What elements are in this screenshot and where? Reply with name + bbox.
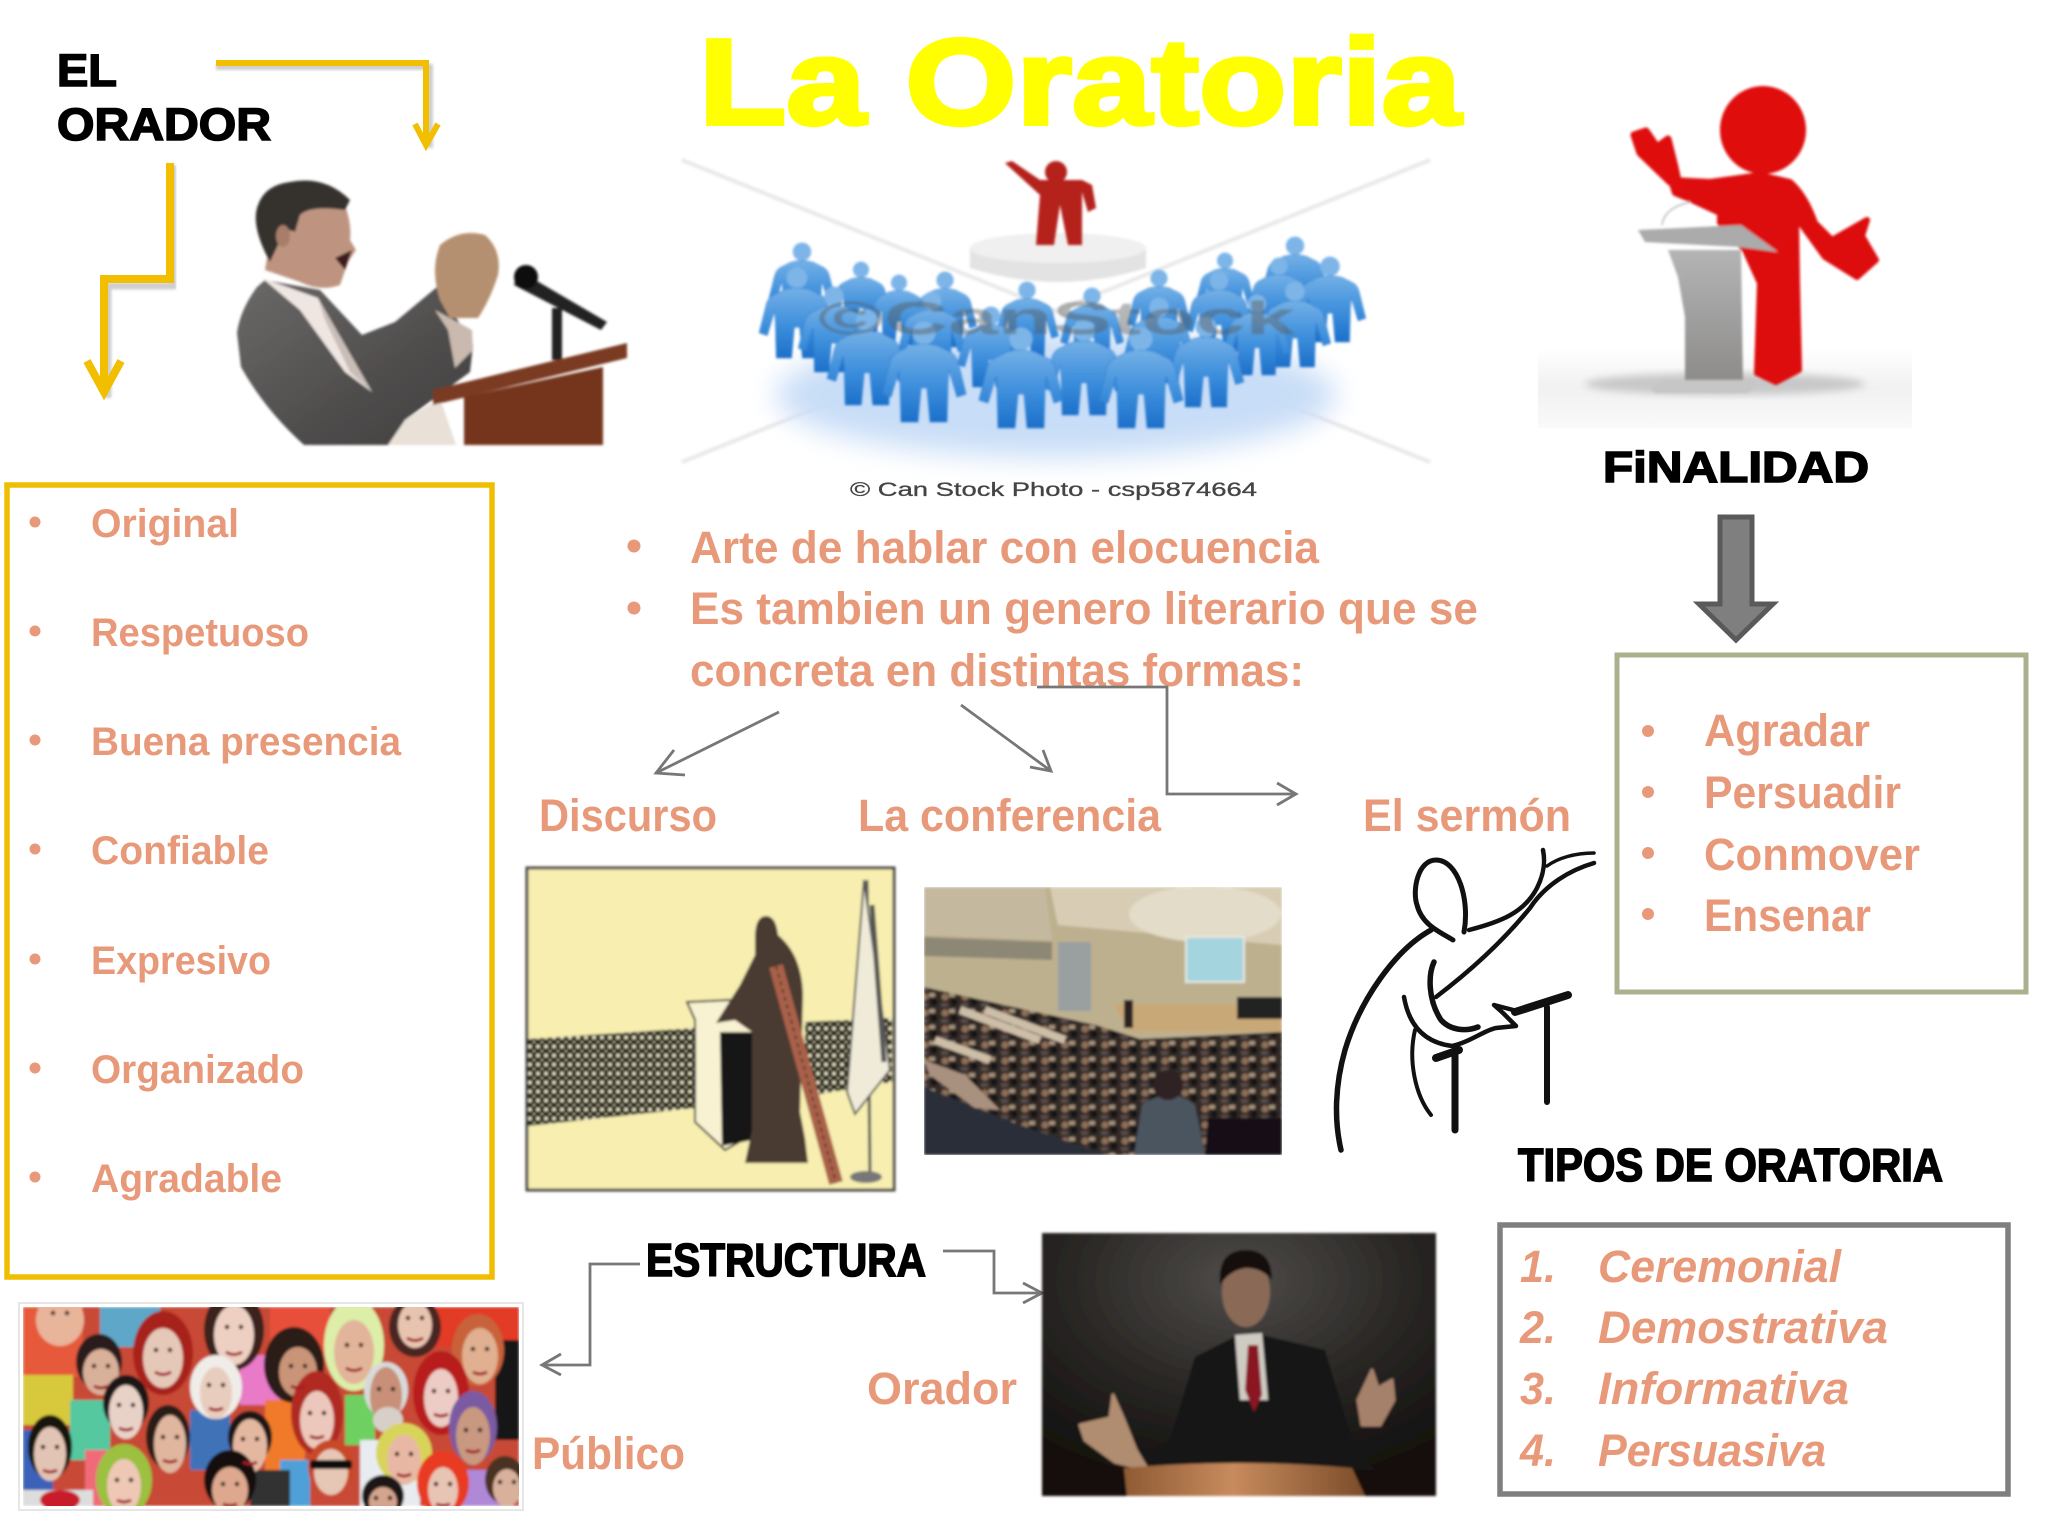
definition text: concreta en distintas formas:	[690, 645, 1304, 696]
image: speaker with raised fists	[237, 180, 627, 445]
image credit: © Can Stock Photo - csp5874664	[850, 480, 1258, 501]
tipos items: 3.	[1520, 1363, 1556, 1414]
image: conference hall	[924, 886, 1282, 1155]
arrow: to conferencia	[961, 705, 1051, 771]
label: discurso: Discurso	[539, 790, 717, 841]
finalidad items	[1642, 705, 1920, 941]
tipos items: Ceremonial	[1598, 1241, 1842, 1292]
label: publico: Público	[532, 1428, 685, 1479]
arrow: orador to list	[87, 163, 173, 398]
tipos items: 2.	[1519, 1302, 1556, 1353]
arrow: estructura to orador	[943, 1251, 1042, 1303]
label: la conferencia: La conferencia	[858, 790, 1162, 841]
panel: tipos list	[1500, 1225, 2008, 1494]
blue audience	[759, 237, 1366, 428]
image: audience and red speaker on platform	[682, 160, 1430, 501]
heading: tipos de oratoria: TIPOS DE ORATORIA	[1518, 1139, 1943, 1191]
heading: el orador: ORADOR	[57, 99, 271, 150]
image: speaker in dark suit	[1042, 1233, 1436, 1496]
qualities list	[30, 502, 402, 1201]
image: sermon line drawing	[1336, 850, 1594, 1150]
qualities list: Organizado	[91, 1048, 304, 1092]
heading: el orador	[57, 45, 271, 150]
red figure	[1005, 161, 1096, 245]
panel: finalidad list	[1617, 655, 2026, 992]
arrow: finalidad down	[1699, 517, 1773, 640]
tipos items: Demostrativa	[1598, 1302, 1888, 1353]
platform	[970, 233, 1146, 282]
arrow: orador to photo	[216, 63, 438, 148]
image: orator illustration on yellow	[527, 868, 894, 1190]
arrow: to discurso	[656, 712, 779, 775]
arrow: to sermon	[1037, 687, 1296, 805]
tipos items: Persuasiva	[1598, 1425, 1826, 1476]
finalidad items: Agradar	[1704, 705, 1870, 756]
qualities list: Original	[91, 502, 239, 546]
heading: el orador: EL	[57, 45, 117, 96]
finalidad items: Persuadir	[1704, 767, 1901, 818]
tipos items: 1.	[1520, 1241, 1556, 1292]
definition text: Es tambien un genero literario que se	[690, 583, 1478, 634]
tipos items: 4.	[1519, 1425, 1556, 1476]
qualities list: Buena presencia	[91, 720, 402, 764]
watermark: ©CanStock	[818, 292, 1296, 344]
qualities list: Confiable	[91, 829, 269, 873]
heading: estructura: ESTRUCTURA	[646, 1234, 926, 1286]
qualities list: Agradable	[91, 1157, 282, 1201]
qualities list: Respetuoso	[91, 611, 309, 655]
definition text: Arte de hablar con elocuencia	[690, 522, 1320, 573]
panel: orador qualities	[7, 485, 492, 1277]
image: red figure at lectern	[1538, 86, 1912, 428]
faces	[26, 1307, 519, 1506]
label: orador: Orador	[867, 1363, 1017, 1414]
finalidad items: Ensenar	[1704, 890, 1871, 941]
qualities list: Expresivo	[91, 939, 271, 983]
title: La Oratoria	[699, 14, 1462, 150]
finalidad items: Conmover	[1704, 829, 1920, 880]
label: el sermon: El sermón	[1363, 790, 1571, 841]
heading: finalidad: FiNALIDAD	[1603, 443, 1869, 492]
definition text	[628, 522, 1478, 696]
image: painted crowd of faces	[19, 1290, 525, 1517]
tipos items: Informativa	[1598, 1363, 1849, 1414]
tipos items	[1519, 1241, 1888, 1476]
arrow: estructura to publico	[542, 1264, 640, 1375]
